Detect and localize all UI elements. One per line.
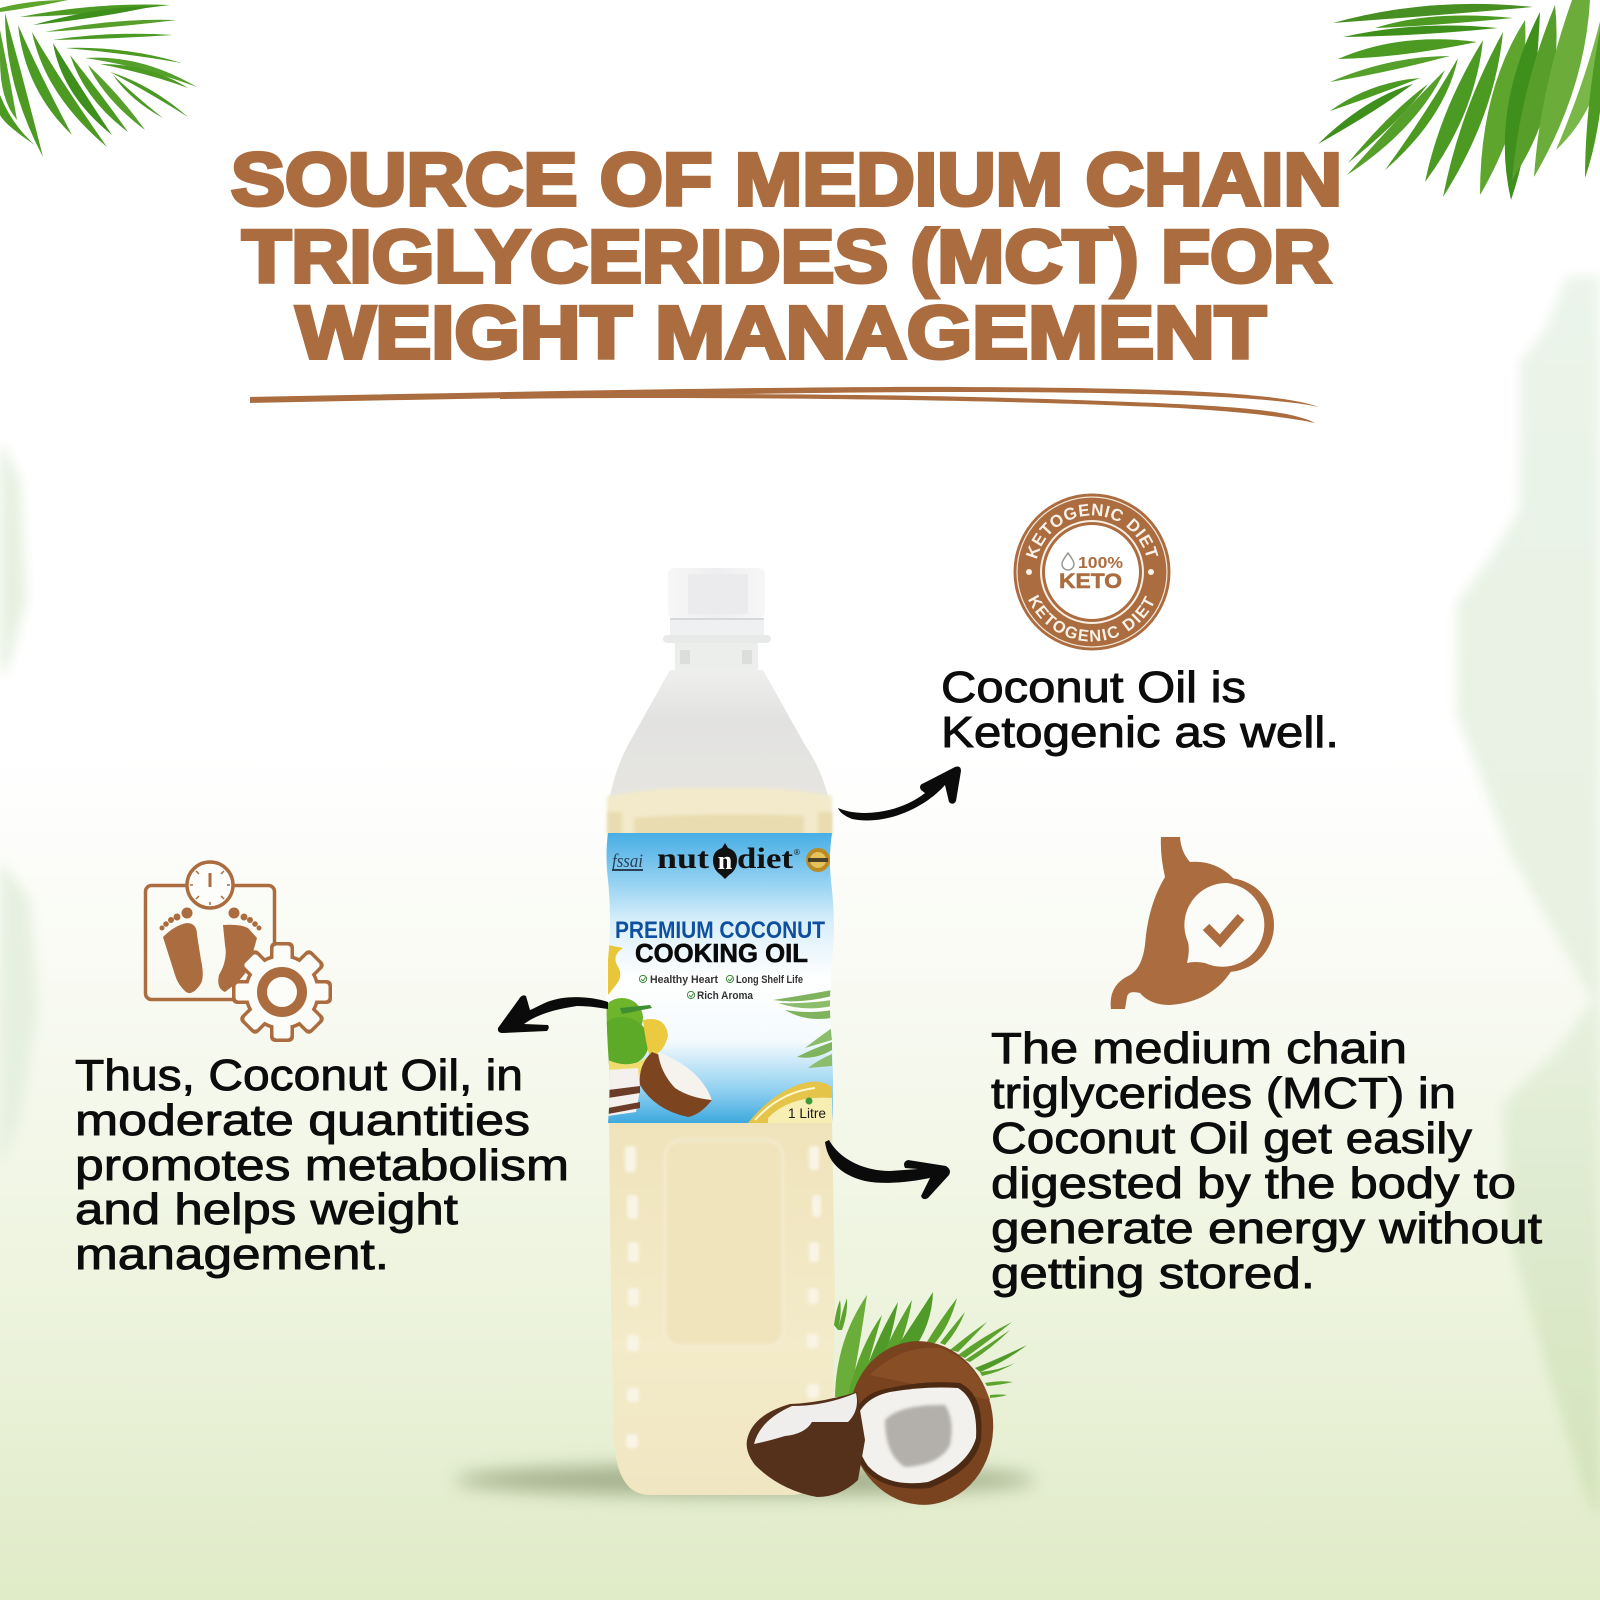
veg mark [806,1098,812,1104]
icon: keto badge: 100% [1078,555,1123,572]
palm leaf top-right [1318,0,1600,200]
arrow: to digestion [825,1140,950,1199]
label benefits: Rich Aroma [697,990,754,1002]
nutndiet logo: nut [657,842,709,875]
palm leaf top-left [0,0,197,157]
label benefits: Healthy Heart [650,974,718,986]
title: SOURCE OF MEDIUM CHAIN [231,138,1342,221]
label benefits [639,974,803,1002]
label oil splash [748,1082,832,1123]
label heading: PREMIUM COCONUT [615,917,825,944]
text: metabolism [75,1051,569,1279]
bottle neck [663,635,771,671]
floor shadow [455,1464,1035,1496]
bottle shoulder [607,670,832,830]
label coconut art [595,945,712,1117]
oil upper darker band [608,812,832,835]
text: ketogenic: Ketogenic as well. [941,708,1339,757]
label benefits: Long Shelf Life [736,974,803,986]
title: WEIGHT MANAGEMENT [296,291,1266,374]
coconuts [747,1332,1004,1514]
label heading [615,917,825,968]
text: metabolism: management. [75,1230,389,1279]
nutndiet logo: n [718,846,733,875]
text: metabolism: and helps weight [75,1185,458,1234]
text: metabolism: moderate quantities [75,1096,530,1145]
icon: stomach [1111,837,1274,1009]
palm frond behind coconuts [834,1292,1027,1398]
arrow: to keto badge [838,766,961,821]
label background [606,833,834,1123]
label heading: COOKING OIL [635,938,808,968]
icon: weighing scale with gear [146,862,332,1042]
icon: keto badge: KETO [1059,570,1122,593]
icon: keto badge: KETOGENIC DIET [1026,504,1158,559]
title [231,138,1342,374]
text: digestion: generate energy without [991,1204,1542,1253]
nutndiet logo [657,842,800,879]
bottle center panel [665,1140,783,1346]
text: digestion: digested by the body to [991,1159,1516,1208]
text: digestion [991,1024,1542,1298]
text: digestion: Coconut Oil get easily [991,1114,1472,1163]
bottle [607,568,835,1495]
text: metabolism: promotes metabolism [75,1141,569,1190]
text: digestion: The medium chain [991,1024,1407,1073]
bottle cap [668,568,765,635]
text: metabolism: Thus, Coconut Oil, in [75,1051,523,1100]
fssai logo: fssai [612,851,643,872]
coconut large half [838,1332,1004,1514]
bottle lower body [609,1120,835,1495]
nutndiet logo: diet [737,842,793,875]
text: ketogenic: Coconut Oil is [941,663,1246,712]
text: ketogenic [941,663,1339,757]
coconut small half [747,1392,865,1497]
gold seal [806,848,830,872]
oil upper [607,788,832,836]
title underline [250,387,1319,423]
product label [595,833,834,1123]
title: TRIGLYCERIDES (MCT) FOR [242,215,1331,298]
icon: keto badge [1014,494,1170,650]
nutndiet logo: ® [794,848,800,857]
label volume: 1 Litre [788,1105,826,1121]
bottle highlights [625,1146,821,1448]
text: digestion: getting stored. [991,1249,1315,1298]
text: digestion: triglycerides (MCT) in [991,1069,1456,1118]
label palm leaves [773,990,832,1068]
icon: keto badge: KETOGENIC DIET [1028,594,1154,642]
arrow: to weight management [498,995,608,1033]
